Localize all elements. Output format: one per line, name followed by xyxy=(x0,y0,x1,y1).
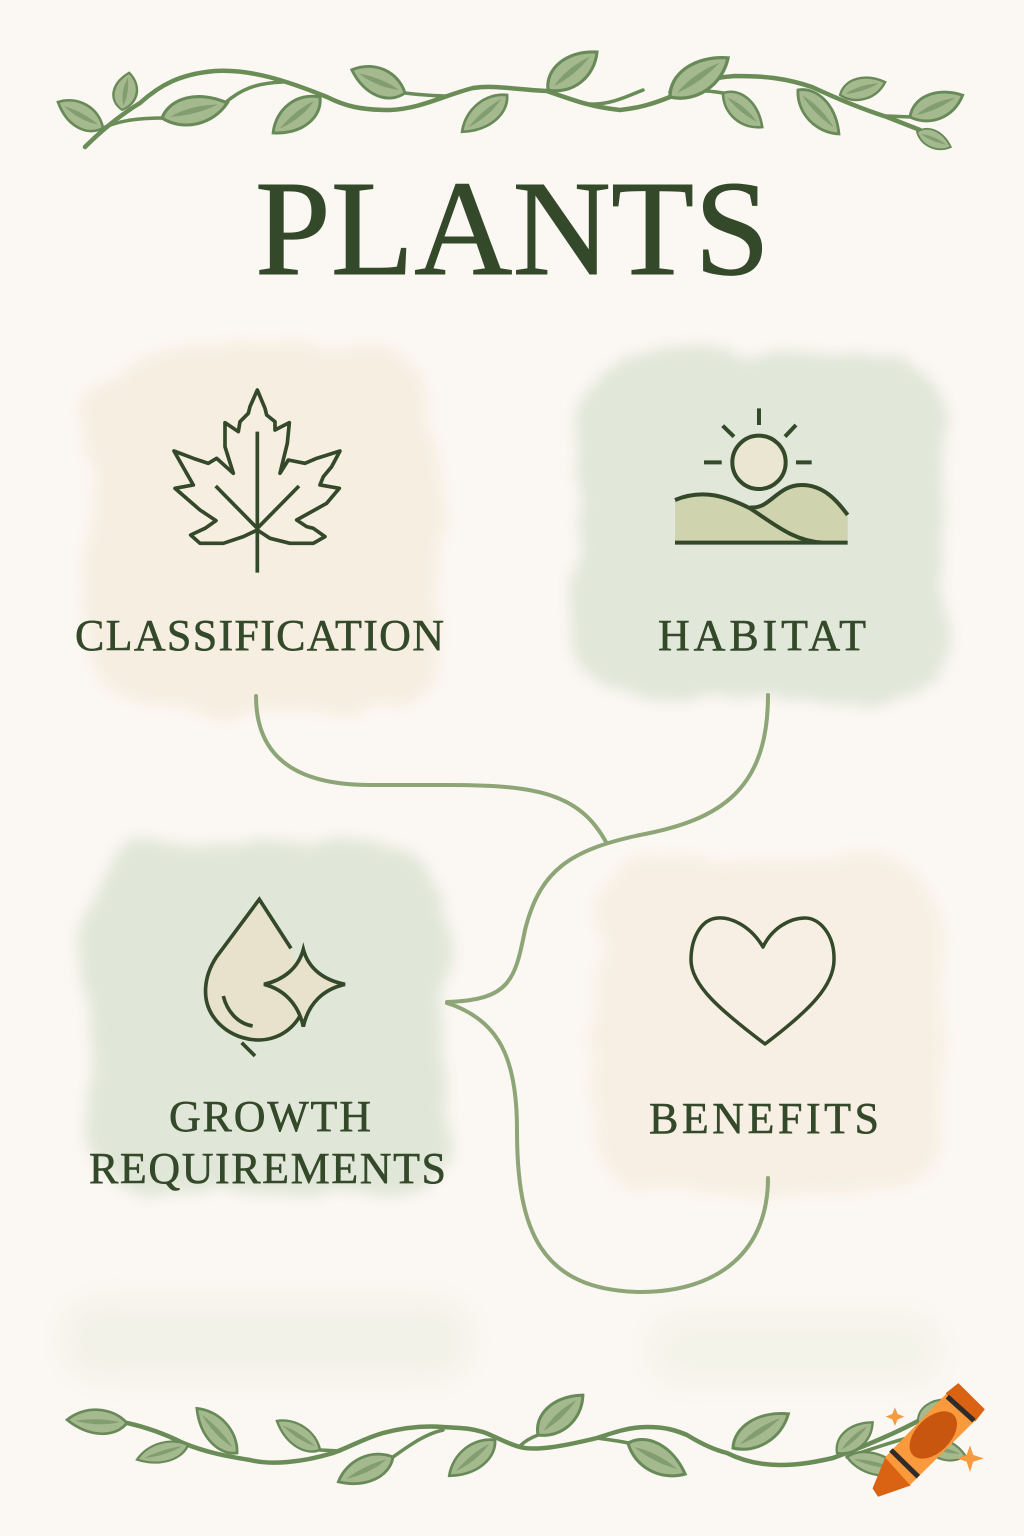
panel: benefits xyxy=(592,860,942,1195)
icon: heart xyxy=(691,918,834,1044)
panel: growth requirements xyxy=(88,845,446,1195)
connector lines xyxy=(256,695,768,1292)
panel: habitat xyxy=(576,354,942,700)
faint wash: lower right xyxy=(650,1315,940,1385)
crayon tip xyxy=(873,1457,910,1496)
label: growth requirements: GROWTH xyxy=(169,1092,371,1141)
crayon stripes xyxy=(891,1397,974,1477)
top vine garland xyxy=(52,41,968,155)
label: classification: CLASSIFICATION xyxy=(75,611,444,660)
classification wash xyxy=(88,348,438,710)
bottom vine garland xyxy=(66,1385,968,1493)
icon: sun over hills xyxy=(675,408,848,543)
benefits wash xyxy=(592,860,942,1195)
icon: orange crayon with sparkles xyxy=(873,1384,984,1496)
label: growth requirements: REQUIREMENTS xyxy=(89,1144,446,1193)
crayon label oval xyxy=(901,1402,966,1468)
icon: maple leaf xyxy=(174,390,340,573)
label: benefits: BENEFITS xyxy=(649,1094,879,1143)
crayon body xyxy=(885,1393,975,1485)
title: PLANTS xyxy=(255,154,770,304)
habitat wash xyxy=(576,354,942,700)
sparkles xyxy=(886,1407,984,1472)
growth wash xyxy=(88,845,446,1195)
faint wash: lower left xyxy=(62,1300,472,1380)
bottom vine leaves xyxy=(66,1385,968,1493)
crayon cap xyxy=(947,1384,984,1421)
panel: classification xyxy=(75,348,444,710)
label: habitat: HABITAT xyxy=(658,611,866,660)
label: growth requirements xyxy=(89,1092,446,1193)
icon: water drop and sparkle xyxy=(206,899,345,1056)
top vine leaves xyxy=(52,41,968,155)
